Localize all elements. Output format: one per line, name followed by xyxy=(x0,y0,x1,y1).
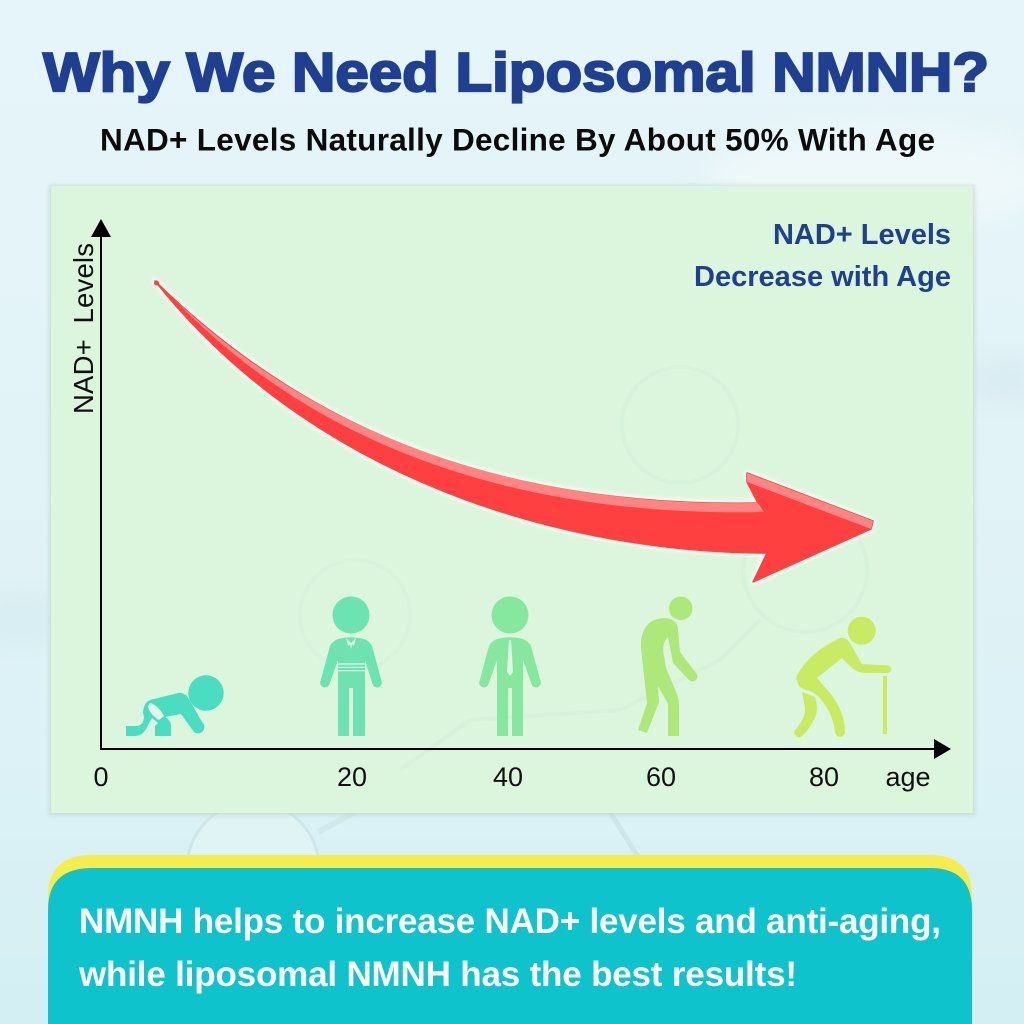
icon: elderly person with cane, age 80 xyxy=(794,617,891,737)
panel: conclusion card xyxy=(48,855,972,1024)
icon: young man, age 20 xyxy=(320,596,382,736)
chart caption xyxy=(694,219,951,293)
icon: crawling baby, age 0 xyxy=(126,675,224,736)
icon: adult man with tie, age 40 xyxy=(479,596,541,736)
decline arrow xyxy=(154,280,873,582)
x axis with arrow xyxy=(100,739,951,759)
conclusion text: NMNH helps to increase NAD+ levels and anti-aging, xyxy=(79,902,941,941)
subtitle: NAD+ Levels Naturally Decline By About 50% With Age xyxy=(100,122,935,158)
x axis tick labels: 60 xyxy=(646,762,676,792)
chart caption: NAD+ Levels xyxy=(773,219,951,251)
icon: stooped older person, age 60 xyxy=(638,596,697,736)
y axis label: NAD+ Levels xyxy=(68,243,99,414)
conclusion text xyxy=(78,902,941,994)
x axis tick labels: 20 xyxy=(337,762,367,792)
x axis tick labels: 0 xyxy=(93,762,109,792)
x axis tick labels xyxy=(93,762,931,792)
conclusion text: while liposomal NMNH has the best results! xyxy=(78,955,797,994)
y axis with arrow xyxy=(91,219,111,750)
x axis tick labels: 80 xyxy=(809,762,839,792)
chart caption: Decrease with Age xyxy=(694,261,951,293)
panel: NAD+ chart background xyxy=(49,185,975,815)
title: Why We Need Liposomal NMNH? xyxy=(43,41,989,103)
x axis tick labels: 40 xyxy=(493,762,523,792)
x axis tick labels: age xyxy=(885,762,931,792)
